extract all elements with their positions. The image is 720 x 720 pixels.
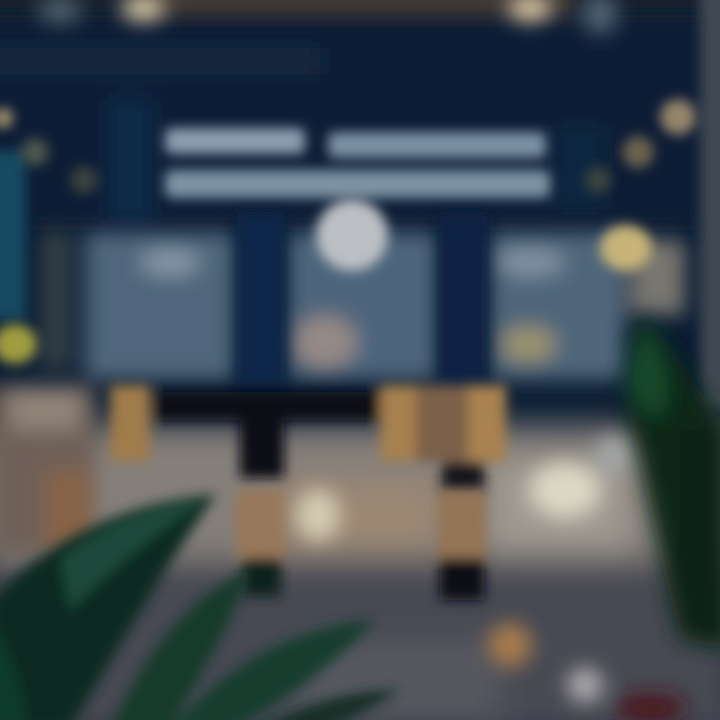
navy columns [238,212,486,387]
left shelf [0,385,95,555]
round pendant lamp [316,199,388,271]
right plant [625,320,720,650]
bottom-left plant [0,495,400,720]
lower posts [236,490,486,600]
floor [0,425,720,720]
wall lights [0,99,696,364]
window panels [40,230,685,380]
ceiling lights [38,0,618,34]
bright highlights [296,437,686,720]
ceiling strip [0,0,720,15]
headline text band [165,128,550,198]
wall background [0,15,720,230]
left teal panel [0,150,26,320]
wooden counter and dark band [110,385,506,492]
right wall strip [700,0,720,410]
